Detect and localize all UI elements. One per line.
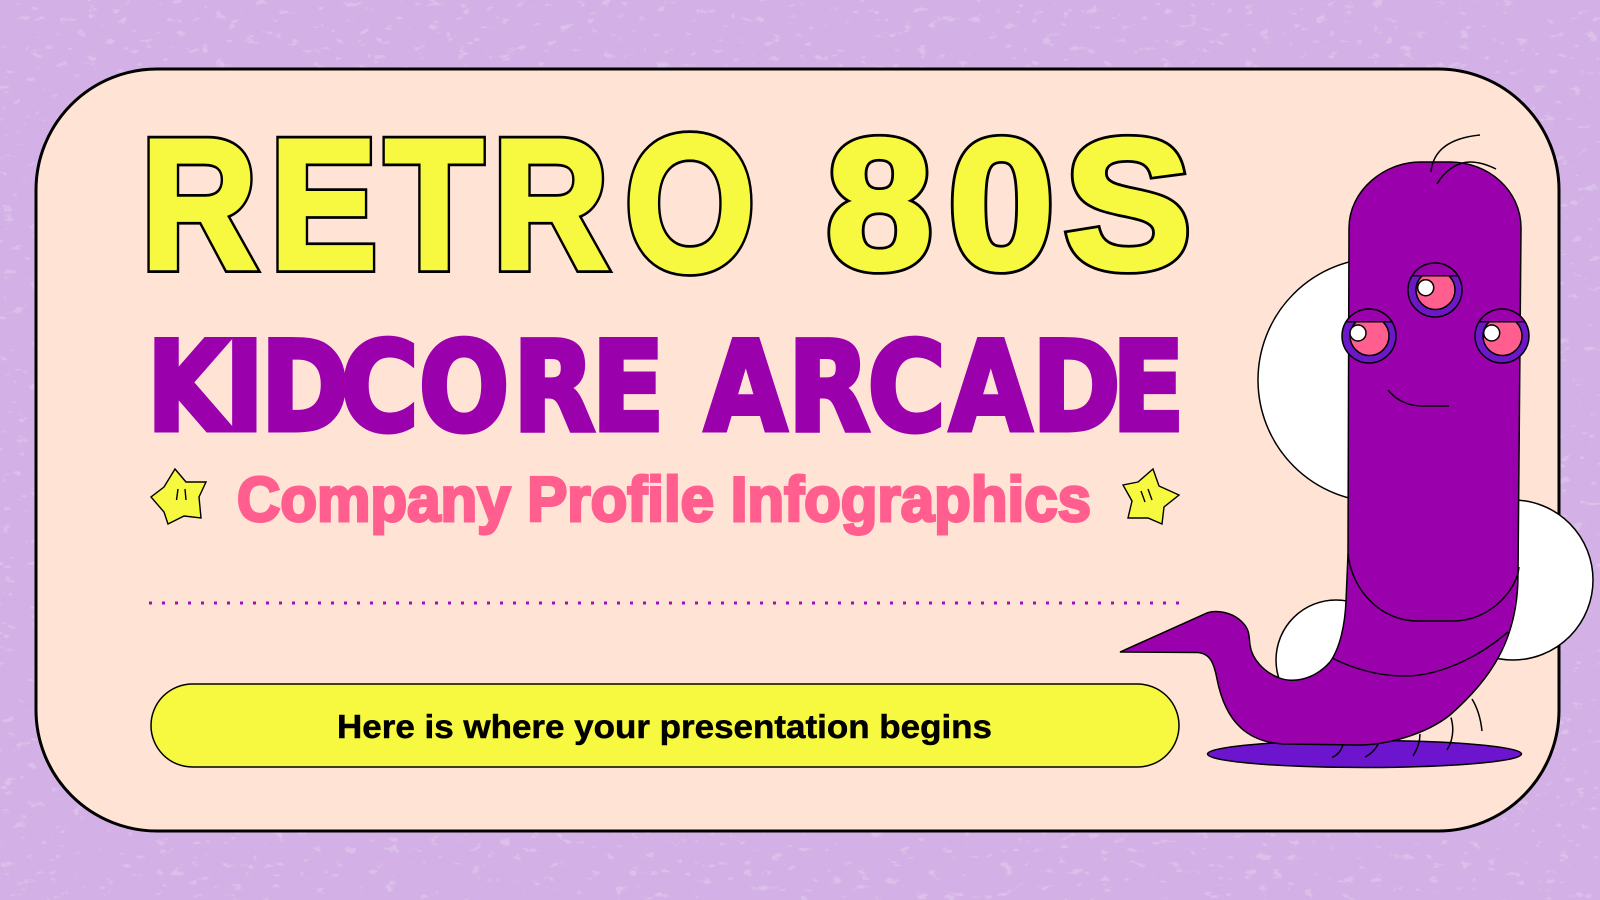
belly lines <box>1332 554 1519 676</box>
icon: right star <box>1123 469 1179 524</box>
eye: right <box>1475 309 1529 363</box>
white circle: right <box>1433 500 1593 660</box>
title: RETRO 80S: 80S <box>826 101 1191 307</box>
white circle: left big <box>1258 258 1502 502</box>
title: RETRO 80S: RETR <box>141 100 609 307</box>
smile <box>1388 390 1449 406</box>
ground shadow <box>1208 740 1522 768</box>
body <box>1120 162 1521 745</box>
title: RETRO 80S <box>141 96 1191 312</box>
hair <box>1431 135 1496 184</box>
heading: KIDCORE ARCADE: KIDCORE ARCADE <box>147 316 1185 460</box>
illustration: purple three-eyed monster <box>1120 135 1593 768</box>
callout: subtitle pill <box>151 684 1179 767</box>
title: RETRO 80S: O <box>625 96 755 312</box>
eye: left <box>1342 309 1396 363</box>
legs <box>1332 699 1482 758</box>
icon: left star <box>151 469 206 524</box>
subtitle: Company Profile Infographics: Company Profile Infographics <box>237 465 1091 535</box>
white circle: bottom <box>1276 600 1396 720</box>
eye: top <box>1408 263 1462 317</box>
callout: subtitle pill: Here is where your presentation begins <box>337 708 992 745</box>
